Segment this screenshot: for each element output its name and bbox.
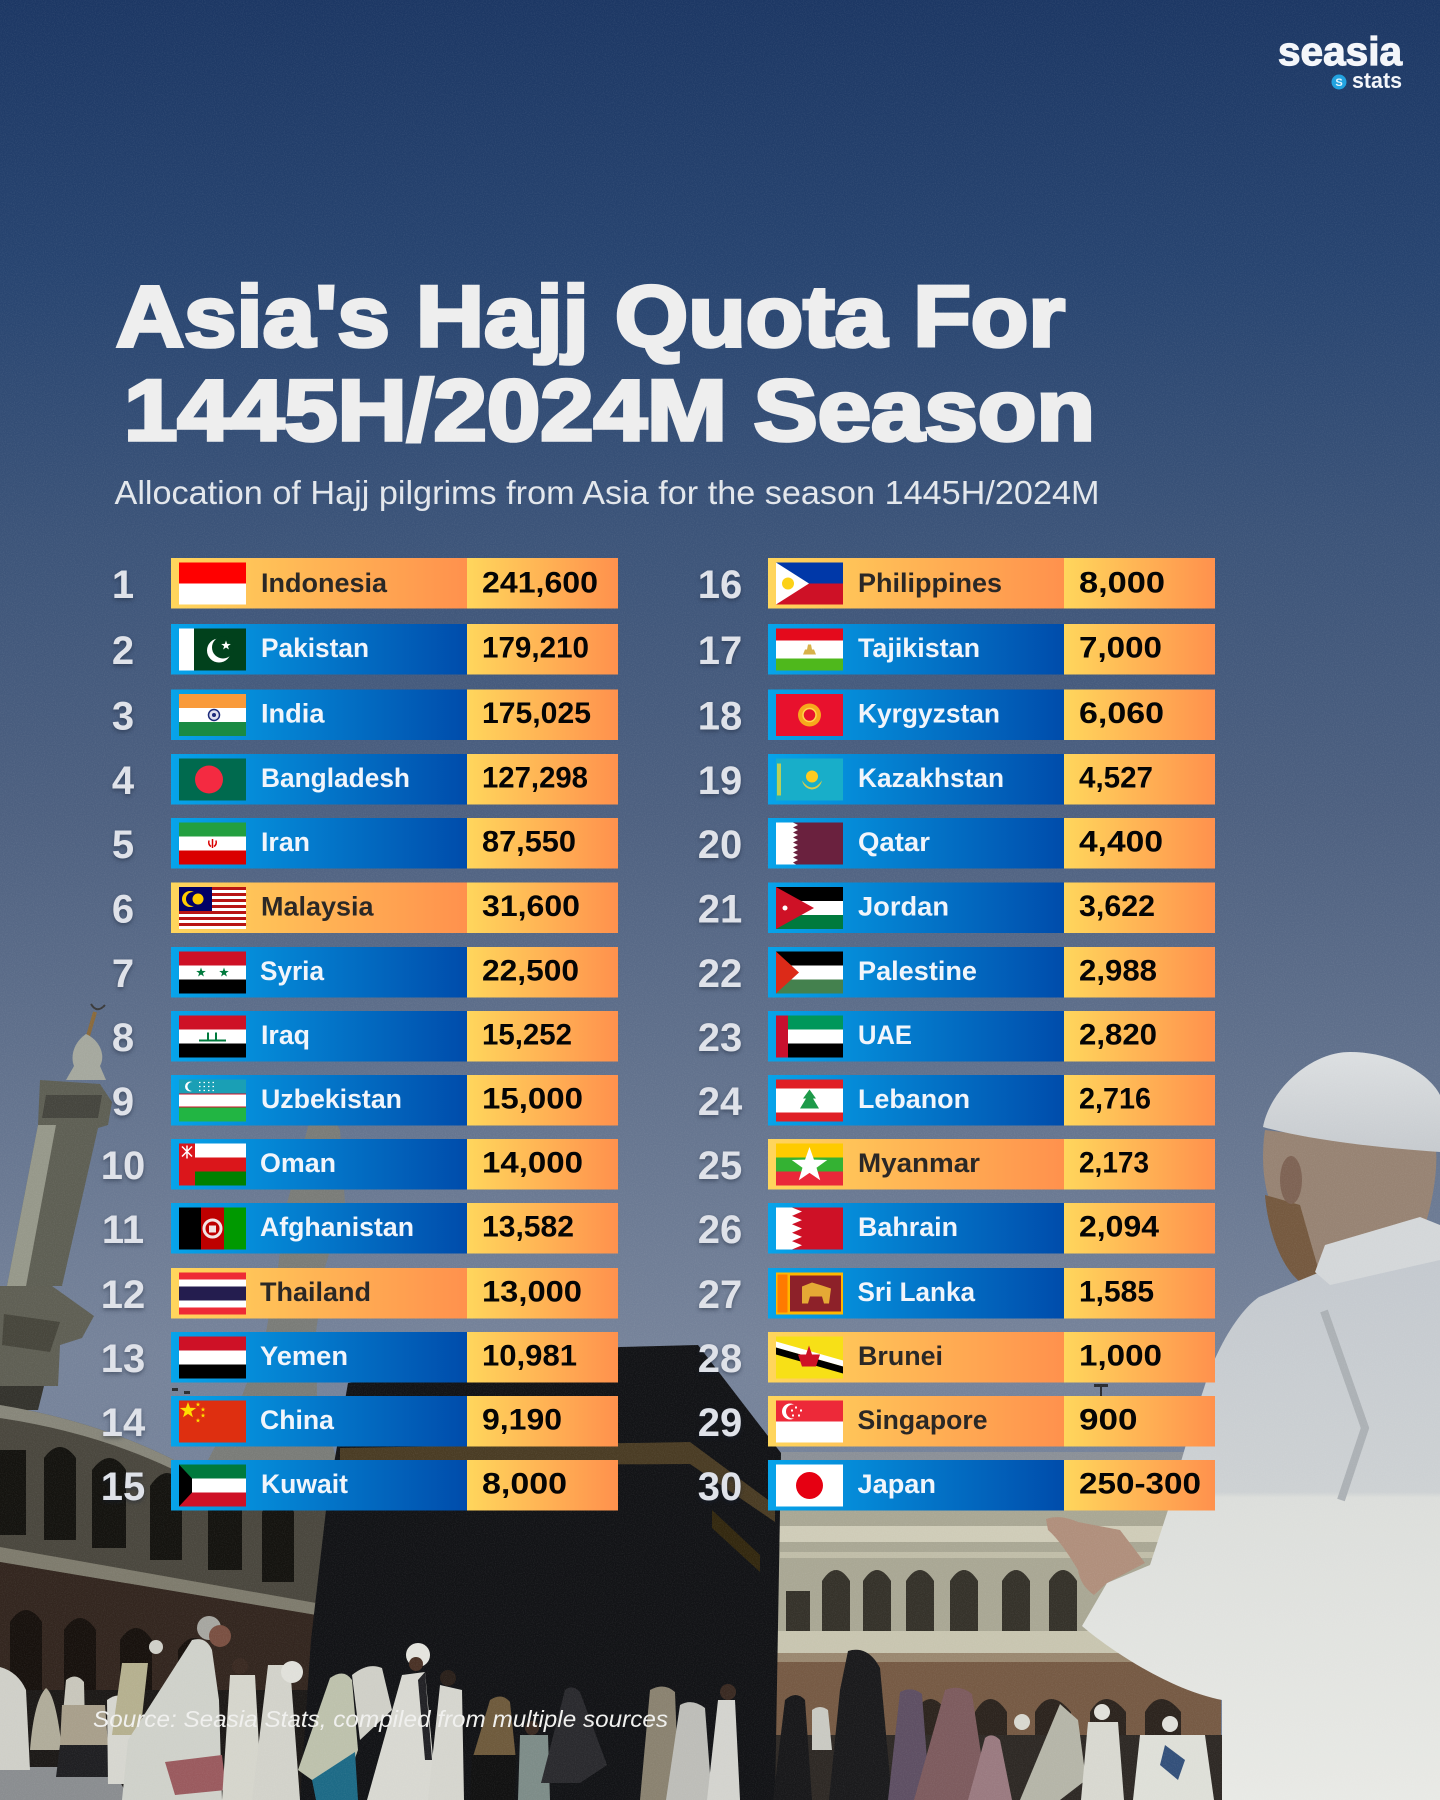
value Kyrgyzstan: 6,060 [1079, 697, 1164, 730]
rank 15: 15 [101, 1465, 145, 1509]
rank 18: 18 [698, 694, 742, 738]
value Yemen: 10,981 [482, 1340, 577, 1372]
man collar [1315, 1217, 1440, 1285]
flag Sri Lanka [776, 1272, 843, 1314]
flag Kyrgyzstan [776, 694, 843, 736]
row 15 Kuwait [101, 1460, 618, 1510]
photo: crowd left [0, 1616, 740, 1800]
value Singapore: 900 [1079, 1404, 1138, 1436]
rank 13: 13 [101, 1337, 145, 1381]
row 14 China [101, 1396, 618, 1446]
flag India [179, 694, 246, 736]
flag Syria [179, 952, 246, 994]
flag Tajikistan [776, 628, 843, 670]
flag Japan [776, 1464, 843, 1506]
value UAE: 2,820 [1079, 1018, 1157, 1052]
row 17 Tajikistan [698, 624, 1215, 674]
flag Indonesia [179, 562, 246, 604]
row 30 Japan [698, 1460, 1215, 1510]
value Syria: 22,500 [482, 954, 579, 988]
row 28 Brunei [698, 1332, 1215, 1382]
flag China [179, 1400, 246, 1442]
rank 16: 16 [698, 563, 742, 607]
value Malaysia: 31,600 [482, 890, 580, 923]
name Japan: Japan [858, 1469, 936, 1499]
value India: 175,025 [482, 697, 591, 730]
flag Lebanon [776, 1080, 843, 1122]
value Palestine: 2,988 [1079, 954, 1157, 988]
flag Myanmar [776, 1144, 843, 1186]
row 18 Kyrgyzstan [698, 690, 1215, 740]
name Pakistan: Pakistan [261, 633, 369, 663]
photo: left colonnade [0, 1405, 340, 1800]
value China: 9,190 [482, 1404, 562, 1436]
value Bangladesh: 127,298 [482, 762, 588, 794]
value Indonesia: 241,600 [482, 566, 598, 600]
name Indonesia: Indonesia [261, 568, 388, 598]
flag UAE [776, 1016, 843, 1058]
value Iran: 87,550 [482, 826, 576, 858]
name Iraq: Iraq [261, 1020, 310, 1050]
rank 9: 9 [112, 1080, 134, 1124]
rank 17: 17 [698, 629, 742, 673]
row 8 Iraq [112, 1011, 618, 1062]
value Thailand: 13,000 [482, 1276, 582, 1308]
flag Afghanistan [179, 1208, 246, 1250]
name Brunei: Brunei [858, 1341, 943, 1371]
title: 1445H/2024M Season [124, 363, 1095, 459]
flag Philippines [776, 562, 843, 604]
rank 7: 7 [112, 952, 134, 996]
row 5 Iran [112, 818, 618, 868]
rank 27: 27 [698, 1273, 742, 1317]
rank 12: 12 [101, 1273, 145, 1317]
row 24 Lebanon [698, 1075, 1215, 1126]
value Brunei: 1,000 [1079, 1340, 1162, 1372]
name Philippines: Philippines [858, 568, 1002, 598]
rank 1: 1 [112, 563, 134, 607]
flag Thailand [179, 1272, 246, 1314]
value Sri Lanka: 1,585 [1079, 1276, 1154, 1308]
row 12 Thailand [101, 1268, 618, 1318]
rank 10: 10 [101, 1144, 145, 1188]
rank 30: 30 [698, 1465, 742, 1509]
row 26 Bahrain [698, 1203, 1215, 1254]
title: Asia's Hajj Quota For [116, 269, 1065, 365]
man ear [1280, 1156, 1302, 1204]
logo subword: stats [1352, 68, 1402, 93]
rank 2: 2 [112, 629, 134, 673]
flag Kuwait [179, 1464, 246, 1506]
flag Kazakhstan [776, 758, 843, 800]
rank 19: 19 [698, 759, 742, 803]
row 20 Qatar [698, 818, 1215, 868]
flag Palestine [776, 952, 843, 994]
flag Oman [179, 1144, 246, 1186]
rank 20: 20 [698, 823, 742, 867]
value Afghanistan: 13,582 [482, 1210, 574, 1244]
photo: Kaaba [300, 1345, 781, 1800]
rank 11: 11 [102, 1208, 144, 1252]
name Kyrgyzstan: Kyrgyzstan [858, 698, 1000, 728]
row 7 Syria [112, 947, 618, 998]
value Japan: 250-300 [1079, 1468, 1201, 1500]
flag Bahrain [776, 1208, 843, 1250]
man sleeve seam [1324, 1311, 1365, 1500]
rank 5: 5 [112, 823, 134, 867]
name Palestine: Palestine [858, 956, 977, 986]
name Tajikistan: Tajikistan [858, 633, 980, 663]
logo [1278, 30, 1403, 93]
photo: minaret behind table [208, 1090, 345, 1460]
value Philippines: 8,000 [1079, 566, 1165, 600]
row 13 Yemen [101, 1332, 618, 1382]
flag Iran [179, 822, 246, 864]
rank 22: 22 [698, 952, 742, 996]
value Tajikistan: 7,000 [1079, 632, 1162, 664]
flag Brunei [776, 1336, 843, 1378]
value Oman: 14,000 [482, 1146, 583, 1180]
row 4 Bangladesh [112, 754, 618, 804]
value Bahrain: 2,094 [1079, 1210, 1159, 1244]
row 1 Indonesia [112, 558, 618, 608]
row 27 Sri Lanka [698, 1268, 1215, 1318]
value Kazakhstan: 4,527 [1079, 762, 1153, 794]
name Kuwait: Kuwait [261, 1469, 348, 1499]
flag Bangladesh [179, 758, 246, 800]
name Lebanon: Lebanon [858, 1084, 970, 1114]
value Qatar: 4,400 [1079, 826, 1163, 858]
flag Pakistan [179, 628, 246, 670]
name Malaysia: Malaysia [261, 892, 374, 922]
photo: man in white [1046, 1052, 1440, 1800]
subtitle: Allocation of Hajj pilgrims from Asia for the season 1445H/2024M [114, 474, 1100, 511]
rank 8: 8 [112, 1016, 134, 1060]
rank 21: 21 [698, 888, 742, 932]
logo icon: S [1335, 77, 1343, 89]
name Singapore: Singapore [858, 1405, 988, 1435]
name India: India [261, 698, 325, 728]
flag Jordan [776, 887, 843, 929]
row 11 Afghanistan [102, 1203, 618, 1254]
value Pakistan: 179,210 [482, 632, 589, 664]
man hand [1046, 1517, 1145, 1595]
rank 29: 29 [698, 1401, 742, 1445]
value Lebanon: 2,716 [1079, 1082, 1151, 1116]
name Kazakhstan: Kazakhstan [858, 763, 1004, 793]
name China: China [260, 1405, 335, 1435]
flag Uzbekistan [179, 1080, 246, 1122]
value Myanmar: 2,173 [1079, 1146, 1149, 1180]
row 9 Uzbekistan [112, 1075, 618, 1126]
flag Malaysia [179, 887, 246, 929]
row 29 Singapore [698, 1396, 1215, 1446]
rank 25: 25 [698, 1144, 742, 1188]
man head [1263, 1130, 1436, 1285]
row 22 Palestine [698, 947, 1215, 998]
title [116, 269, 1095, 459]
rank 3: 3 [112, 694, 134, 738]
name Bahrain: Bahrain [858, 1212, 958, 1242]
logo wordmark: seasia [1278, 30, 1403, 74]
photo: minaret left [0, 1004, 112, 1410]
rank 6: 6 [112, 888, 134, 932]
name Sri Lanka: Sri Lanka [858, 1277, 976, 1307]
value Kuwait: 8,000 [482, 1468, 567, 1500]
flag Qatar [776, 822, 843, 864]
rank 4: 4 [112, 759, 135, 803]
name Uzbekistan: Uzbekistan [261, 1084, 402, 1114]
name Thailand: Thailand [260, 1277, 371, 1307]
row 23 UAE [698, 1011, 1215, 1062]
name Qatar: Qatar [858, 827, 930, 857]
name Yemen: Yemen [260, 1341, 348, 1371]
man cap [1263, 1052, 1440, 1152]
row 19 Kazakhstan [698, 754, 1215, 804]
name Oman: Oman [260, 1148, 336, 1178]
name Afghanistan: Afghanistan [260, 1212, 414, 1242]
man beard [1265, 1195, 1320, 1285]
name Syria: Syria [260, 956, 325, 986]
man robe [1082, 1240, 1440, 1800]
rank 24: 24 [698, 1080, 743, 1124]
name UAE: UAE [858, 1020, 912, 1050]
flag Iraq [179, 1016, 246, 1058]
photo: floodlights [172, 1384, 1108, 1397]
row 25 Myanmar [698, 1139, 1215, 1190]
rank 28: 28 [698, 1337, 742, 1381]
row 3 India [112, 690, 618, 740]
row 6 Malaysia [112, 882, 618, 933]
name Myanmar: Myanmar [858, 1148, 981, 1178]
name Jordan: Jordan [858, 892, 949, 922]
rank 14: 14 [101, 1401, 146, 1445]
row 21 Jordan [698, 882, 1215, 933]
row 10 Oman [101, 1139, 618, 1190]
photo: right building [771, 1452, 1231, 1800]
photo: crowd right [773, 1650, 1214, 1800]
value Jordan: 3,622 [1079, 890, 1155, 923]
flag Yemen [179, 1336, 246, 1378]
rank 26: 26 [698, 1208, 742, 1252]
row 16 Philippines [698, 558, 1215, 608]
name Bangladesh: Bangladesh [261, 763, 410, 793]
value Uzbekistan: 15,000 [482, 1082, 583, 1116]
row 2 Pakistan [112, 624, 618, 674]
flag Singapore [776, 1400, 843, 1442]
source note: Source: Seasia Stats, compiled from multiple sources [93, 1706, 669, 1732]
name Iran: Iran [261, 827, 310, 857]
rank 23: 23 [698, 1016, 742, 1060]
value Iraq: 15,252 [482, 1018, 572, 1052]
